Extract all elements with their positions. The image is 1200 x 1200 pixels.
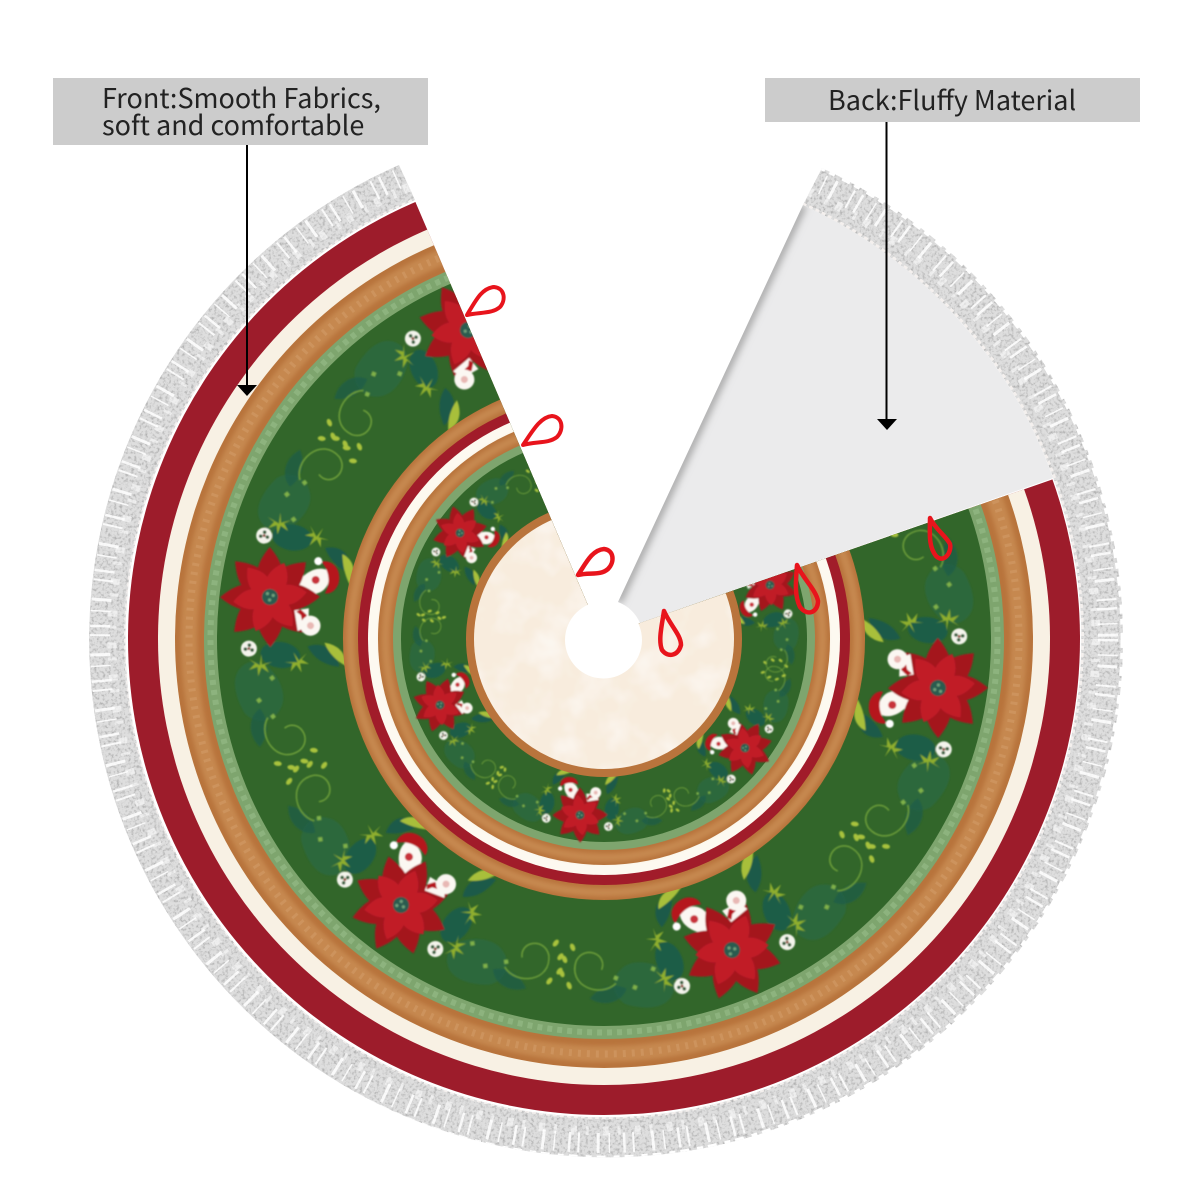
silver tassel fringe — [86, 121, 1122, 1157]
centre orange rim — [466, 501, 742, 777]
back flap — [618, 205, 1053, 623]
centre hole — [565, 602, 642, 678]
inner ring orange band — [343, 378, 865, 900]
outer red band — [128, 163, 1080, 1115]
skirt front panel — [128, 163, 1080, 1115]
inner ring second orange band — [378, 413, 830, 865]
cream band — [158, 193, 1050, 1085]
label: back material — [765, 78, 1140, 122]
arrow: front material — [237, 145, 257, 396]
label: front material — [53, 77, 428, 145]
label: front material: Front:Smooth Fabrics, — [102, 77, 381, 116]
inner ring red band — [358, 393, 850, 885]
inner dark green field — [401, 436, 807, 842]
arrow: back material — [877, 122, 897, 430]
dark green field — [217, 252, 991, 1026]
label: front material: soft and comfortable — [102, 104, 364, 143]
inner motifs — [410, 468, 799, 843]
green patterned band — [204, 239, 1004, 1039]
orange patterned band — [175, 210, 1033, 1068]
label: back material: Back:Fluffy Material — [828, 79, 1076, 118]
inner ring white band — [368, 403, 840, 875]
outer motifs: poinsettia and gnomes — [220, 286, 988, 1008]
ribbon ties — [467, 287, 950, 655]
inner ring green band — [393, 428, 815, 850]
centre cream disc — [474, 509, 734, 769]
